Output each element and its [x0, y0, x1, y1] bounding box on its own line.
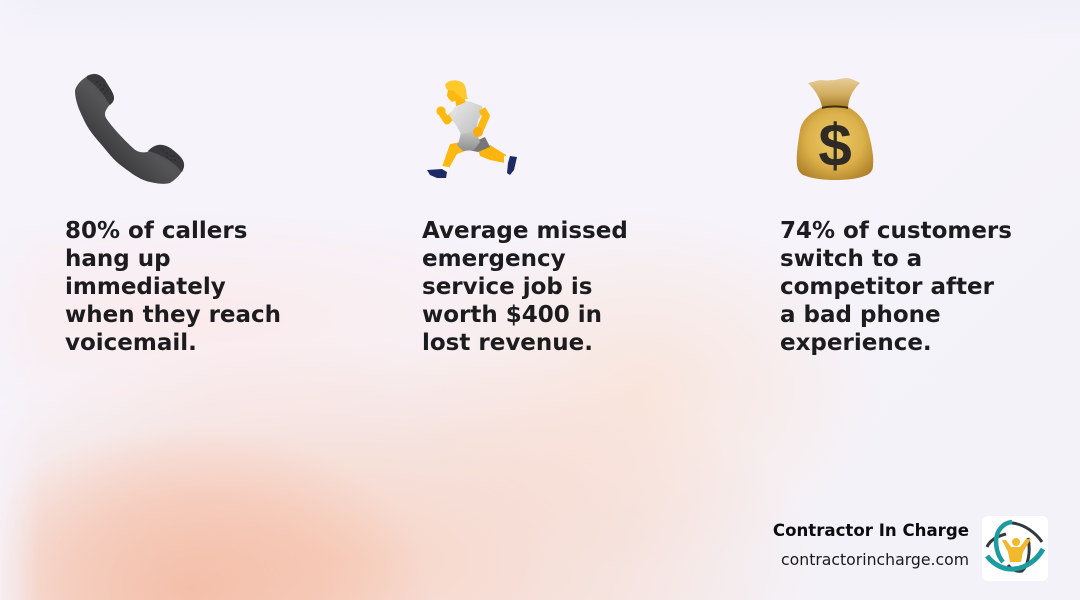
text: missed job stat: emergency	[422, 246, 566, 272]
text: competitor stat: switch to a	[780, 246, 922, 272]
shirt	[449, 101, 483, 134]
text: competitor stat: competitor after	[780, 274, 994, 300]
text: voicemail stat: voicemail.	[65, 330, 197, 356]
text: competitor stat: 74% of customers	[780, 218, 1012, 244]
text: voicemail stat	[65, 218, 281, 356]
text: voicemail stat: 80% of callers	[65, 218, 247, 244]
brand name: Contractor In Charge	[773, 521, 969, 540]
text: missed job stat: service job is	[422, 274, 592, 300]
text: competitor stat: a bad phone	[780, 302, 941, 328]
back arm	[479, 109, 486, 132]
dollar sign: $	[818, 112, 852, 179]
text: voicemail stat: immediately	[65, 274, 226, 300]
logo	[982, 516, 1048, 581]
text: missed job stat: Average missed	[422, 218, 628, 244]
text: competitor stat: experience.	[780, 330, 932, 356]
text: voicemail stat: when they reach	[65, 302, 281, 328]
head	[447, 89, 460, 102]
back shorts	[468, 137, 490, 152]
brand url: contractorincharge.com	[781, 550, 969, 569]
front leg	[442, 142, 468, 168]
text: missed job stat: worth $400 in	[422, 302, 602, 328]
text: voicemail stat: hang up	[65, 246, 171, 272]
back leg	[478, 145, 506, 163]
text: missed job stat	[422, 218, 628, 356]
text: competitor stat	[780, 218, 1012, 356]
front shorts	[457, 131, 480, 151]
neck	[455, 94, 466, 106]
front arm	[441, 112, 454, 121]
text: missed job stat: lost revenue.	[422, 330, 593, 356]
